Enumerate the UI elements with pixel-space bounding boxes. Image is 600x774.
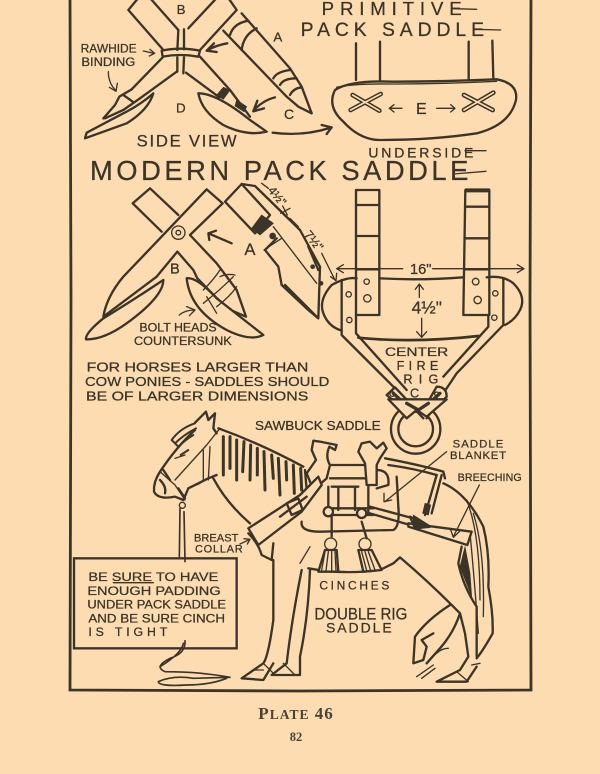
dimension: 4 1/2 by 7 1/2 xyxy=(262,183,337,281)
label: breast collar xyxy=(194,533,250,556)
label: double rig saddle: DOUBLE RIG xyxy=(314,604,407,623)
title: primitive pack saddle xyxy=(301,0,501,41)
mane xyxy=(218,428,303,495)
label: part letters xyxy=(176,2,294,122)
label: part letters: C xyxy=(284,106,294,122)
label: saddle blanket xyxy=(384,438,506,502)
callout: padding note: BE SURE TO HAVE xyxy=(88,570,218,584)
panel: horse with sawbuck saddle xyxy=(74,399,522,685)
label: E: E xyxy=(416,101,427,118)
label: underside: UNDERSIDE xyxy=(368,144,473,160)
callout: padding note: ENOUGH PADDING xyxy=(87,584,221,598)
illustration: modern side view xyxy=(86,183,337,348)
label: letter A: A xyxy=(244,240,256,259)
label: rawhide binding: RAWHIDE xyxy=(81,42,137,56)
title: modern pack saddle: MODERN PACK SADDLE xyxy=(90,155,468,186)
label: center fire rig xyxy=(385,345,449,400)
illustration: metal ring xyxy=(388,399,447,454)
arrow: to bolt xyxy=(208,231,232,243)
note: larger horses: FOR HORSES LARGER THAN xyxy=(87,360,308,375)
page frame xyxy=(70,0,531,691)
dimension: 4 1/2 by 7 1/2: 4½" xyxy=(265,184,289,209)
note: larger horses: BE OF LARGER DIMENSIONS xyxy=(86,389,308,404)
label: cinches: CINCHES xyxy=(319,578,389,592)
arrow: to binding xyxy=(207,43,227,52)
caption: page number: 82 xyxy=(290,730,302,744)
illustration: side view of primitive saddle xyxy=(81,0,332,151)
illustration: sawbuck saddle xyxy=(248,441,472,572)
label: bolt heads countersunk: COUNTERSUNK xyxy=(134,334,232,348)
caption: plate number: PLATE 46 xyxy=(258,704,334,723)
label: breeching: BREECHING xyxy=(458,472,522,484)
panel: primitive pack saddle xyxy=(81,0,516,186)
callout: padding note xyxy=(74,558,237,648)
breeching xyxy=(408,523,472,545)
callout: padding note: AND BE SURE CINCH xyxy=(88,612,225,626)
dimension: 4 1/2 inches: 4½" xyxy=(412,297,442,317)
title: primitive pack saddle: PACK SADDLE xyxy=(301,20,484,41)
label: E xyxy=(389,101,455,118)
label: saddle blanket: BLANKET xyxy=(450,450,506,462)
cinches xyxy=(318,515,382,572)
part A xyxy=(223,13,312,113)
label: double rig saddle: SADDLE xyxy=(326,620,392,636)
caption: side view: SIDE VIEW xyxy=(137,132,237,151)
lead rope xyxy=(158,508,230,685)
label: sawbuck saddle: SAWBUCK SADDLE xyxy=(255,419,381,433)
label: breeching xyxy=(451,472,522,537)
panel: modern pack saddle xyxy=(85,183,524,418)
horse body xyxy=(213,478,477,682)
label: center fire rig: FIRE xyxy=(397,359,438,373)
note: larger horses xyxy=(85,360,329,404)
arrow: to underside xyxy=(273,125,332,134)
dimension: 16 inches xyxy=(337,262,524,278)
callout: padding note: UNDER PACK SADDLE xyxy=(87,597,226,611)
label: part letters: D xyxy=(176,101,186,116)
label: double rig saddle xyxy=(314,604,407,636)
label: bolt heads countersunk: BOLT HEADS xyxy=(139,321,217,335)
label: breast collar: BREAST xyxy=(194,533,239,545)
illustration: horse xyxy=(154,412,493,682)
label: bolt heads countersunk xyxy=(134,307,232,348)
label: center fire rig: C xyxy=(410,386,419,400)
note: larger horses: COW PONIES - SADDLES SHOULD xyxy=(85,374,329,389)
label: center fire rig: RIG xyxy=(403,372,438,386)
label: saddle blanket: SADDLE xyxy=(453,438,504,450)
arrow: to foot xyxy=(253,97,275,111)
label: breast collar: COLLAR xyxy=(195,544,243,556)
label: rawhide binding xyxy=(81,42,155,91)
illustration: underside xyxy=(332,41,516,160)
horse tail xyxy=(443,483,493,658)
dimension: 16 inches: 16" xyxy=(410,262,432,278)
dimension: 4 1/2 inches xyxy=(412,284,442,337)
breast collar xyxy=(248,477,322,545)
label: part letters: B xyxy=(177,2,186,17)
illustration: center fire rig xyxy=(322,189,524,418)
label: letter B: B xyxy=(170,261,180,277)
horse head xyxy=(154,412,220,508)
label: part letters: A xyxy=(273,30,282,45)
label: center fire rig: CENTER xyxy=(385,345,449,359)
illustration: part A cross piece xyxy=(225,184,323,318)
label: rawhide binding: BINDING xyxy=(81,55,135,69)
callout: padding note: IS TIGHT xyxy=(88,625,168,639)
dimension: 4 1/2 by 7 1/2: 7½" xyxy=(301,228,326,254)
